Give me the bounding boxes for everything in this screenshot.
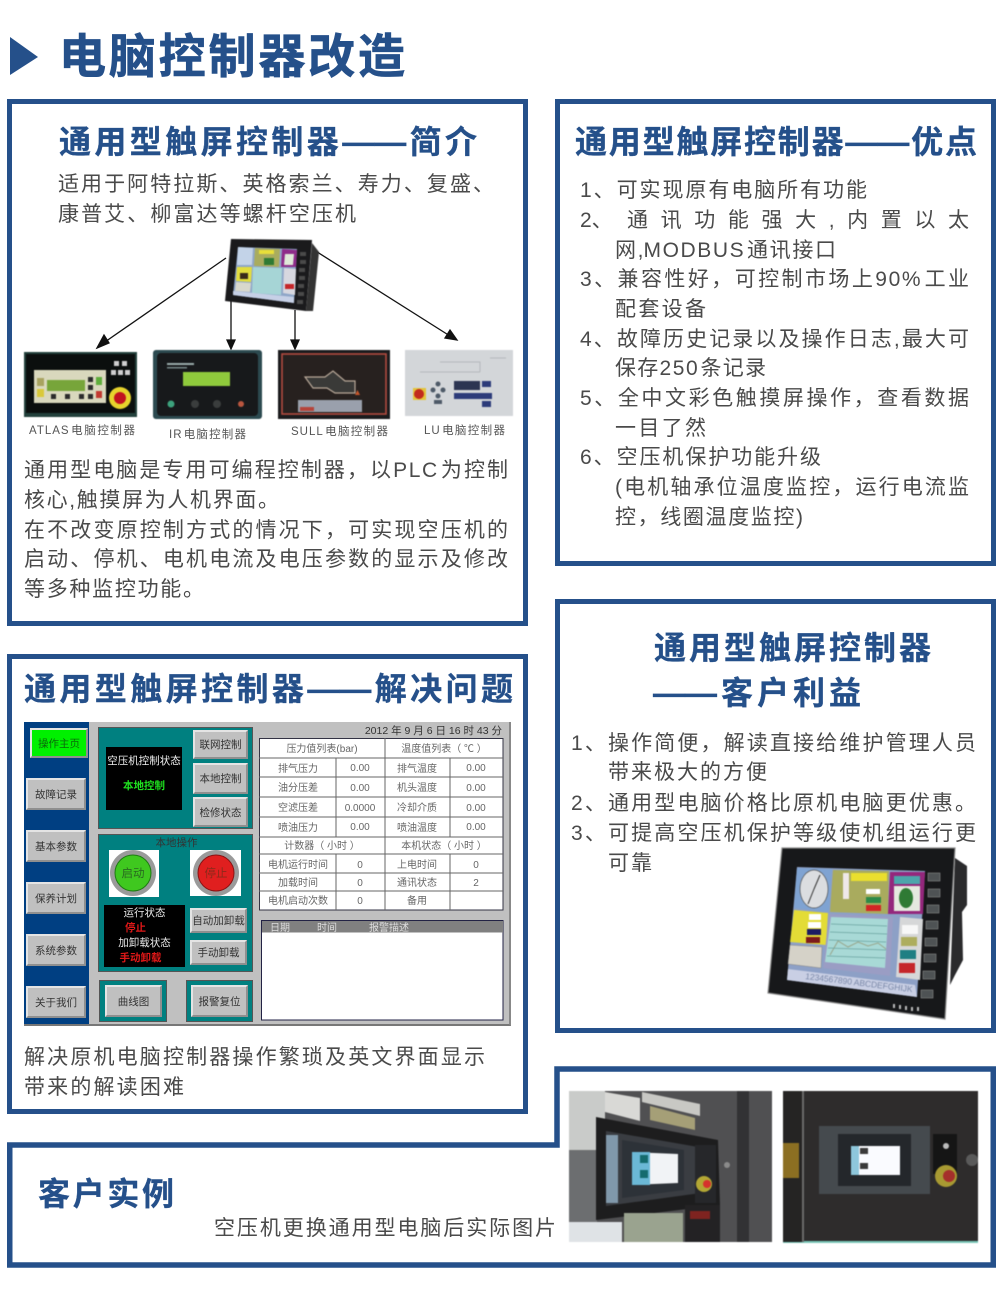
button: maintenance state: 检修状态: [200, 806, 242, 818]
button: manual unload: 手动卸载: [198, 947, 240, 959]
controller: SULL: [277, 349, 391, 420]
button: local control: [193, 763, 248, 794]
data table: [259, 738, 504, 910]
nav button: system parameters: [26, 934, 86, 966]
label: ATLAS: ATLAS电脑控制器: [29, 425, 135, 437]
button: curve: [105, 985, 162, 1017]
data table: 0.00: [466, 803, 486, 814]
data table: 空滤压差: [278, 801, 318, 814]
advantages list: 通讯功能强大,内置以太: [627, 208, 969, 232]
controller: LU: [404, 350, 514, 416]
benefits list: 2、通用型电脑价格比原机电脑更优惠。: [571, 792, 976, 814]
icon: large touch screen: 1234567890 ABCDEFGHIJK: [805, 971, 913, 994]
heading: advantages: 通用型触屏控制器——优点: [575, 124, 977, 160]
description text: 核心,触摸屏为人机界面。: [24, 488, 279, 512]
photo: installed screen left: [568, 1090, 773, 1243]
panel frame: [7, 99, 528, 626]
panel: advantages: [555, 99, 996, 566]
nav button: home: 操作主页: [38, 738, 80, 750]
advantages list: 3、兼容性好，可控制市场上90%工业: [580, 268, 969, 290]
date and time: 2012 年 9 月 6 日 16 时 43 分: [365, 725, 502, 737]
icon: large touch screen: [766, 846, 968, 1020]
data table: 0.00: [350, 763, 370, 774]
caption: 空压机更换通用型电脑后实际图片: [214, 1216, 556, 1240]
heading: solving problems: 通用型触屏控制器——解决问题: [24, 671, 513, 707]
benefits list: 3、可提高空压机保护等级使机组运行更: [571, 822, 976, 844]
button: maintenance state: [193, 797, 248, 827]
panel frame: [555, 599, 996, 1033]
advantages list: 1、可实现原有电脑所有功能: [580, 178, 867, 202]
description text: 在不改变原控制方式的情况下，可实现空压机的: [24, 518, 508, 542]
data table: 0: [357, 878, 363, 889]
description text: 通用型电脑是专用可编程控制器，以PLC为控制: [24, 458, 508, 482]
data table: 上电时间: [397, 858, 437, 871]
panel: solving problems: [7, 654, 528, 1114]
panel frame: [555, 99, 996, 566]
controller: ATLAS: [23, 351, 138, 418]
run state display: [104, 905, 185, 967]
data table: 冷却介质: [397, 801, 437, 814]
arrows from touch screen to controllers: [96, 252, 458, 350]
advantages list: 配套设备: [615, 298, 706, 320]
data table: 排气压力: [278, 762, 318, 775]
data table: 温度值列表（ ℃ ）: [401, 742, 487, 755]
data table: 压力值列表(bar): [286, 742, 358, 755]
nav button: fault log: 故障记录: [35, 788, 77, 800]
start button: [109, 850, 159, 897]
heading: customer case: 客户实例: [38, 1176, 174, 1212]
L-shaped frame: [7, 1066, 996, 1268]
data table: 0: [357, 896, 363, 907]
data table: 电机运行时间: [268, 858, 328, 871]
navigation sidebar: [24, 722, 89, 1024]
data table: 排气温度: [397, 762, 437, 775]
run state display: 运行状态: [124, 907, 166, 919]
button: network control: 联网控制: [200, 739, 242, 751]
control software screenshot: [24, 722, 511, 1026]
button: auto load: 自动加卸载: [192, 915, 245, 927]
button: local control: 本地控制: [200, 773, 242, 785]
stop button: 停止: [204, 866, 228, 880]
advantages list: 5、全中文彩色触摸屏操作，查看数据: [580, 386, 969, 410]
local operation panel: [98, 834, 253, 972]
start button: 启动: [122, 867, 144, 880]
caption: 带来的解读困难: [24, 1076, 184, 1098]
data table: 0.00: [350, 822, 370, 833]
data table: 通讯状态: [397, 876, 437, 889]
alarm list: [261, 920, 504, 1020]
data table: 机头温度: [397, 781, 437, 794]
run state display: 加卸载状态: [118, 937, 171, 949]
control state display: [106, 747, 182, 810]
button: alarm reset: 报警复位: [198, 996, 240, 1008]
data table: 电机启动次数: [268, 894, 328, 907]
button: auto load: [190, 908, 247, 933]
icon: touch screen HMI: [224, 238, 320, 312]
nav button: fault log: [26, 778, 86, 810]
data table: 计数器（ 小时 ）: [284, 839, 360, 852]
nav button: system parameters: 系统参数: [35, 944, 77, 956]
advantages list: 保存250条记录: [615, 356, 766, 380]
nav button: about: 关于我们: [35, 996, 77, 1008]
data table: 0.00: [466, 763, 486, 774]
data table: 0: [473, 860, 479, 871]
description text: 启动、停机、电机电流及电压参数的显示及修改: [24, 548, 508, 570]
controller: IR: [152, 349, 263, 420]
benefits list: [571, 732, 976, 874]
advantages list: 2、: [580, 208, 613, 232]
data table: 0.00: [466, 822, 486, 833]
heading: introduction: 通用型触屏控制器——简介: [59, 124, 477, 160]
intro text: 康普艾、柳富达等螺杆空压机: [58, 202, 356, 226]
data table: 2: [473, 878, 479, 889]
curve chart button group: [99, 980, 167, 1022]
control state display: 本地控制: [123, 780, 165, 792]
data table: 0.00: [350, 783, 370, 794]
nav button: basic parameters: [26, 830, 86, 862]
button: network control: [193, 730, 248, 759]
control state panel: [98, 727, 253, 829]
title: 电脑控制器改造: [59, 30, 405, 83]
intro text: [58, 172, 494, 226]
heading: benefits line 1: 通用型触屏控制器: [654, 630, 931, 666]
description text: [24, 458, 508, 600]
nav button: maintenance plan: 保养计划: [35, 892, 77, 904]
control state display: 空压机控制状态: [107, 755, 181, 767]
button: alarm reset: [191, 985, 248, 1017]
alarm list: 报警描述: [369, 921, 409, 934]
alarm list: 时间: [317, 921, 337, 934]
nav button: maintenance plan: [26, 882, 86, 914]
label: LU: LU电脑控制器: [424, 425, 505, 437]
data table: 本机状态（ 小时 ）: [401, 839, 487, 852]
advantages list: [580, 178, 969, 528]
data table: 喷油温度: [397, 821, 437, 834]
description text: 等多种监控功能。: [24, 578, 204, 600]
advantages list: 一目了然: [615, 416, 706, 440]
caption: 解决原机电脑控制器操作繁琐及英文界面显示: [24, 1046, 485, 1068]
data table: 喷油压力: [278, 821, 318, 834]
data table: 加载时间: [278, 876, 318, 889]
advantages list: (电机轴承位温度监控，运行电流监: [615, 476, 969, 498]
advantages list: 6、空压机保护功能升级: [580, 446, 821, 468]
run state display: 停止: [125, 922, 146, 934]
panel: customer case: [7, 1066, 996, 1268]
nav button: basic parameters: 基本参数: [35, 840, 77, 852]
photo: installed screen right: [782, 1090, 979, 1244]
alarm list: 日期: [270, 922, 290, 934]
data table: 备用: [407, 894, 427, 907]
label: IR: IR电脑控制器: [169, 429, 246, 441]
nav button: about: [26, 986, 86, 1018]
alarm reset button group: [186, 980, 253, 1022]
benefits list: 1、操作简便，解读直接给维护管理人员: [571, 732, 976, 754]
data table: 0: [357, 860, 363, 871]
advantages list: 控，线圈温度监控): [615, 506, 803, 528]
title icon: triangle: [10, 37, 38, 75]
data table: 0.0000: [345, 803, 376, 814]
benefits list: 带来极大的方便: [608, 760, 767, 784]
benefits list: 可靠: [608, 852, 652, 874]
button: curve: 曲线图: [118, 996, 149, 1008]
heading: benefits line 2: ——客户利益: [653, 675, 861, 711]
panel frame: [7, 654, 528, 1114]
local operation label: 本地操作: [156, 837, 198, 849]
intro text: 适用于阿特拉斯、英格索兰、寿力、复盛、: [58, 172, 494, 196]
panel: customer benefits: [555, 599, 996, 1033]
advantages list: 4、故障历史记录以及操作日志,最大可: [580, 328, 969, 350]
label: SULL: SULL电脑控制器: [291, 426, 388, 438]
stop button: [190, 850, 241, 896]
advantages list: 网,MODBUS通讯接口: [615, 238, 836, 262]
run state display: 手动卸载: [120, 952, 162, 964]
nav button: home: [30, 728, 88, 758]
caption: [24, 1046, 485, 1098]
data table: 油分压差: [278, 781, 318, 794]
panel: introduction: [7, 99, 528, 626]
data table: 0.00: [466, 783, 486, 794]
button: manual unload: [190, 940, 247, 965]
